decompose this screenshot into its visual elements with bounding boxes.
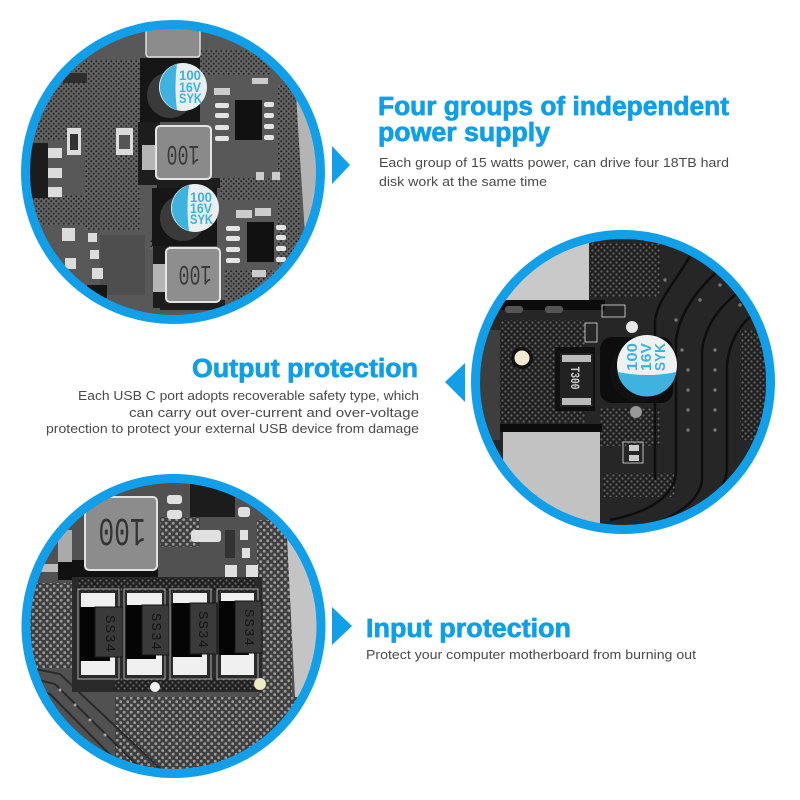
capacitor 1: 16V (179, 79, 202, 95)
chip 2 (247, 222, 274, 262)
capacitor: SYK (652, 343, 669, 371)
heading: Input protection (366, 615, 571, 643)
inductor 1 (156, 126, 211, 179)
heading: Four groups of independent (378, 93, 730, 121)
arrow: points to text (332, 607, 352, 645)
capacitor 2 (160, 184, 219, 241)
capacitor 1: 100 (179, 67, 201, 83)
inductor: 100 (98, 506, 146, 551)
ring (476, 234, 770, 530)
panel: output protection (46, 225, 780, 542)
inductor T300 (555, 347, 595, 411)
photo: USB-C port circuit board (480, 239, 766, 525)
ring (26, 24, 320, 320)
inductor 2: 100 (178, 257, 212, 288)
inductor (85, 497, 157, 570)
diode group: SS34 (194, 611, 210, 648)
diode group: SS34 (240, 609, 256, 646)
description: can carry out over-current and over-voltage (129, 406, 419, 420)
capacitor 2: 16V (190, 200, 213, 216)
photo: circuit board with SS34 diodes (30, 483, 316, 769)
panel: input protection (20, 470, 697, 780)
description (379, 156, 729, 189)
capacitor 2: SYK (190, 211, 213, 227)
heading: Output protection (192, 355, 418, 383)
description: disk work at the same time (379, 175, 547, 189)
heading second line: power supply (378, 119, 551, 147)
capacitor 1 (147, 63, 207, 118)
arrow: points to text (332, 146, 350, 184)
description (46, 389, 419, 436)
capacitor 1: SYK (179, 90, 202, 106)
description: Each USB C port adopts recoverable safety type, which (78, 389, 419, 403)
diode group (78, 589, 262, 679)
capacitor: 16V (638, 343, 655, 371)
chip 1 (235, 100, 262, 140)
capacitor (617, 335, 677, 397)
diode group: SS34 (101, 615, 117, 652)
panel: four groups of independent power supply (20, 15, 730, 330)
arrow: points to text (445, 363, 465, 402)
diode group: SS34 (147, 613, 163, 650)
description: Each group of 15 watts power, can drive four 18TB hard (379, 156, 729, 170)
capacitor: 100 (624, 343, 641, 371)
photo: circuit board with capacitors and inductors (30, 29, 316, 315)
capacitor 2: 100 (190, 189, 212, 205)
ring (26, 478, 321, 774)
inductor 2 (166, 248, 220, 302)
inductor 1: 100 (166, 137, 200, 168)
description: protection to protect your external USB device from damage (46, 422, 419, 436)
description: Protect your computer motherboard from burning out (366, 648, 697, 662)
inductor T300: T300 (567, 366, 582, 390)
top inductor (145, 29, 201, 58)
